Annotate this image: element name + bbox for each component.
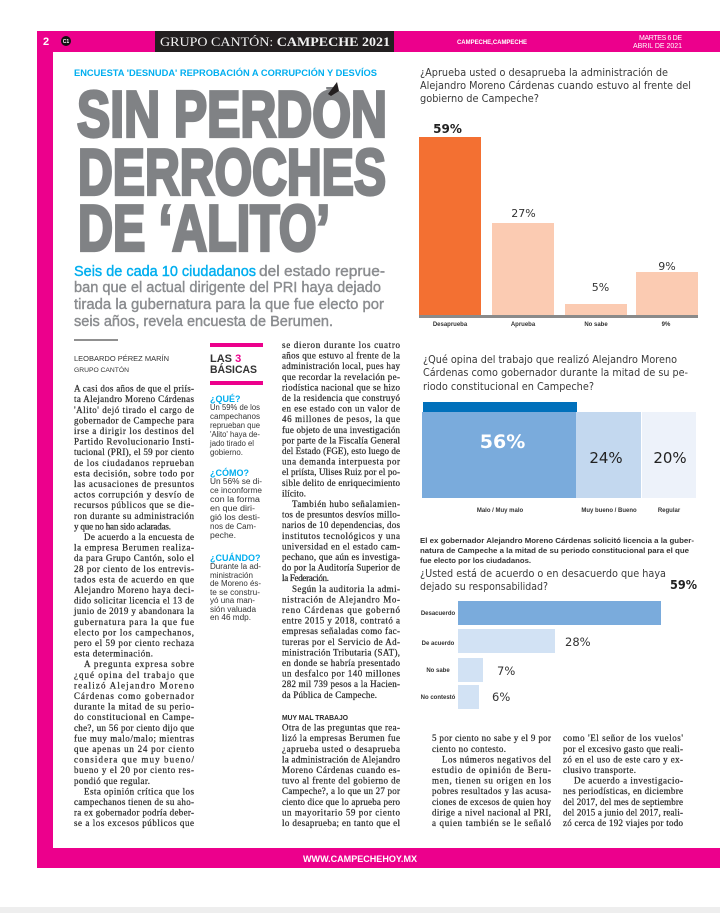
chart 3: agreement horizontal bars: No contestó xyxy=(421,695,456,701)
article column 1: pero el 59 por ciento rechaza xyxy=(74,638,194,648)
article column 2: reno Cárdenas que gobernó xyxy=(282,605,400,615)
article column 1: esta decisión, sobre todo por xyxy=(74,468,194,478)
chart 2: work opinion stacked bar: riodo constitucional en Campeche? xyxy=(423,381,594,393)
article column 2: 282 mil 739 pesos a la Hacien- xyxy=(282,679,400,689)
sidebar: las 3 básicas: gobierno. xyxy=(210,448,243,457)
page frame: header band, side strip and footer: WWW.CAMPECHEHOY.MX xyxy=(303,854,417,864)
sidebar: las 3 básicas xyxy=(209,343,263,622)
article column 2: administración local, pues hay xyxy=(282,361,400,371)
article column 1: 28 por ciento de los entrevis- xyxy=(74,564,194,574)
sidebar: las 3 básicas: ministración xyxy=(210,571,253,580)
article column 1: campechanos tienen de su aho- xyxy=(74,797,194,807)
chart 2: work opinion stacked bar: 20% xyxy=(653,449,687,467)
sidebar: las 3 básicas: campechanos xyxy=(210,412,260,421)
article column 1: recursos públicos que se die- xyxy=(74,500,194,510)
article column 3: Los números negativos del xyxy=(442,754,551,764)
article column 2: años que estuvo al frente de la xyxy=(282,351,400,361)
sidebar: las 3 básicas: gió los desti- xyxy=(210,513,260,522)
article column 1: gubernatura para la que fue xyxy=(74,617,194,627)
article column 3: 5 por ciento no sabe y el 9 por xyxy=(432,733,551,743)
article column 1: de los ciudadanos reprueban xyxy=(74,458,194,468)
article column 2: institutos tecnológicos y una xyxy=(282,531,400,541)
article column 3: men, tienen su origen en los xyxy=(432,776,551,786)
article column 2: universidad en el estado cam- xyxy=(282,541,400,551)
headline: DE ‘ALITO’ xyxy=(78,192,330,264)
chart 2: work opinion stacked bar: Muy bueno / Bueno xyxy=(581,508,637,514)
article column 3: a quien también se le señaló xyxy=(432,818,552,828)
article column 1: bueno y el 20 por ciento res- xyxy=(74,765,194,775)
chart 3: agreement horizontal bars xyxy=(420,568,697,709)
article column 1: do constitucional en Campe- xyxy=(74,712,194,722)
article column 1: actos corrupción y desvío de xyxy=(74,490,194,500)
chart 3: agreement horizontal bars: No sabe xyxy=(426,668,450,674)
article column 2: Otra de las preguntas que rea- xyxy=(282,723,400,733)
article column 3: ciones de excesos de quien hoy xyxy=(432,797,552,807)
article column 2: riodística nacional que se hizo xyxy=(282,382,400,392)
page frame: header band, side strip and footer: C1 xyxy=(63,39,69,45)
article column 1: ta Alejandro Moreno Cárdenas xyxy=(74,394,194,404)
article column 2: la administración de Alejandro xyxy=(282,754,400,764)
subheading xyxy=(74,263,385,330)
article column 1: junio de 2019 y abandonara la xyxy=(73,606,194,616)
article column 1: Esta opinión crítica que los xyxy=(84,786,194,796)
article column 2: sible delito de enriquecimiento xyxy=(282,478,400,488)
article column 2: fue objeto de una investigación xyxy=(282,425,400,435)
chart 3: agreement horizontal bars: 28% xyxy=(565,635,591,649)
article column 2: un mayoritario 59 por ciento xyxy=(282,807,400,817)
chart 3: agreement horizontal bars: 59% xyxy=(670,578,697,592)
kicker: ENCUESTA 'DESNUDA' REPROBACIÓN A CORRUPCIÓN Y DESVÍOS xyxy=(74,67,377,79)
article column 2: da Pública de Campeche. xyxy=(282,690,377,700)
article column 1: esta determinación. xyxy=(74,649,153,659)
article column 2: el priísta, Ulises Ruiz por el po- xyxy=(282,467,400,477)
chart 2: work opinion stacked bar xyxy=(422,354,696,514)
article column 2: que recordar la revelación pe- xyxy=(282,372,400,382)
article column 1: las acusaciones de presuntos xyxy=(74,479,194,489)
article column 4: del 2015 a junio del 2017, reali- xyxy=(563,807,683,817)
article column 2: del Estado (FGE), esto luego de xyxy=(282,446,400,456)
article column 4: como 'El señor de los vuelos' xyxy=(563,733,683,743)
article column 2: do por la Auditoría Superior de xyxy=(282,563,400,573)
chart 2: work opinion stacked bar: Malo / Muy malo xyxy=(477,508,524,514)
article column 2: de la residencia que construyó xyxy=(282,393,400,403)
sidebar: las 3 básicas: ¿CÓMO? xyxy=(210,467,249,478)
chart 1: approval bar chart: gobierno de Campeche? xyxy=(420,93,539,105)
article column 4 xyxy=(563,733,684,828)
chart 1: approval bar chart: ¿Aprueba usted o desaprueba la administración de xyxy=(420,67,668,79)
article column 2: lizó la empresas Berumen fue xyxy=(282,733,400,743)
chart 1: approval bar chart: Aprueba xyxy=(511,322,536,328)
page frame: header band, side strip and footer: 2 xyxy=(43,36,49,48)
subheading: tirada la gubernatura para la que fue electo por xyxy=(74,296,384,313)
sidebar: las 3 básicas: nos de Cam- xyxy=(210,522,256,531)
article column 1: pondió que regular. xyxy=(74,776,150,786)
article column 1: fue muy malo/malo; mientras xyxy=(74,733,194,743)
chart 3: agreement horizontal bars: De acuerdo xyxy=(422,641,455,647)
article column 2: ilícito. xyxy=(282,488,306,498)
article column 1: que apenas un 24 por ciento xyxy=(74,744,194,754)
article column 2: en donde se habría presentado xyxy=(282,658,400,668)
chart 3: agreement horizontal bars: ¿Usted está de acuerdo o en desacuerdo que haya xyxy=(420,568,666,580)
article column 1: A casi dos años de que el priís- xyxy=(74,384,194,394)
article column 1: y que no han sido aclaradas. xyxy=(74,521,171,531)
chart 1: approval bar chart: Desaprueba xyxy=(433,322,468,328)
article column 2: narios de 10 dependencias, dos xyxy=(282,520,400,530)
headline: DERROCHES xyxy=(78,136,386,208)
article column 2: entre 2015 y 2018, contrató a xyxy=(282,616,400,626)
article column 3: estudio de opinión de Beru- xyxy=(432,765,551,775)
article column 3 xyxy=(432,733,552,828)
note on license request: El ex gobernador Alejandro Moreno Cárdenas solicitó licencia a la guber- xyxy=(420,536,695,545)
sidebar: las 3 básicas: ¿CUÁNDO? xyxy=(210,553,260,563)
sidebar: las 3 básicas: ¿QUÉ? xyxy=(210,394,240,404)
article column 4: De acuerdo a investigacio- xyxy=(574,776,683,786)
sidebar: las 3 básicas: BÁSICAS xyxy=(210,363,257,376)
sidebar: las 3 básicas: jado tirado el xyxy=(209,439,254,448)
sidebar: las 3 básicas: ce inconforme xyxy=(210,486,263,495)
article column 4: zó en el uso de este caro y ex- xyxy=(563,754,683,764)
page frame: header band, side strip and footer: MARTES 6 DE xyxy=(639,35,682,42)
chart 1: approval bar chart: No sabe xyxy=(584,322,608,328)
sidebar: las 3 básicas: Un 56% se di- xyxy=(210,477,262,486)
article column 2: Campeche?, a lo que un 27 por xyxy=(282,786,400,796)
article column 2: un desfalco por 140 millones xyxy=(282,669,400,679)
article column 2: ciento dice que lo aprueba pero xyxy=(282,797,400,807)
sidebar: las 3 básicas: de Moreno és- xyxy=(210,579,261,588)
article column 3: dirige a nivel nacional al PRI, xyxy=(432,807,551,817)
article column 1: A pregunta expresa sobre xyxy=(84,659,194,669)
note on license request xyxy=(420,536,695,565)
subheading: seis años, revela encuesta de Berumen. xyxy=(74,313,333,330)
sidebar: las 3 básicas: Durante la ad- xyxy=(210,562,261,571)
article column 2: lo desaprueba; en tanto que el xyxy=(282,818,400,828)
article column 3: ciento no contesto. xyxy=(432,744,506,754)
article column 2: se dieron durante los cuatro xyxy=(282,340,400,350)
article column 4: clusivo transporte. xyxy=(563,765,636,775)
note on license request: natura de Campeche a la mitad de su periodo constitucional para el que xyxy=(420,546,689,555)
article column 2: tos de presuntos desvíos millo- xyxy=(282,510,400,520)
article column 1: la empresa Berumen realiza- xyxy=(74,543,194,553)
article column 2: tuvo al frente del gobierno de xyxy=(282,776,400,786)
chart 1: approval bar chart: 9% xyxy=(658,260,676,273)
article column 1: irse a dirigir los destinos del xyxy=(74,426,194,436)
article column 3: pobres resultados y las acusa- xyxy=(432,786,551,796)
article column 2: una demanda interpuesta por xyxy=(282,457,400,467)
article column 1: tucional (PRI), el 59 por ciento xyxy=(74,447,194,457)
article column 2: nistración de Alejandro Mo- xyxy=(282,594,400,604)
chart 1: approval bar chart: 9% xyxy=(662,322,671,328)
note on license request: fue electo por los ciudadanos. xyxy=(420,556,531,565)
article column 1: ra ex gobernador podría deber- xyxy=(74,808,194,818)
article column 2: ministración Tributaria (SAT), xyxy=(282,647,400,657)
chart 1: approval bar chart: 5% xyxy=(592,281,609,294)
article column 1: realizó Alejandro Moreno xyxy=(74,680,195,690)
sidebar: las 3 básicas: te se constru- xyxy=(210,588,260,597)
sidebar: las 3 básicas: en 46 mdp. xyxy=(210,613,251,622)
article column 4: por el excesivo gasto que reali- xyxy=(563,744,683,754)
article column 1: considera que muy bueno/ xyxy=(74,755,194,765)
subheading: Seis de cada 10 ciudadanos xyxy=(74,263,256,280)
chart 3: agreement horizontal bars: 7% xyxy=(497,664,515,678)
article column 2: empresas señaladas como fac- xyxy=(282,626,400,636)
article column 1: tados esta de acuerdo en que xyxy=(74,574,194,584)
subheading: del estado reprue- xyxy=(259,263,385,280)
article column 4: zó cerca de 192 viajes por todo xyxy=(563,818,684,828)
chart 1: approval bar chart: Alejandro Moreno Cárdenas cuando estuvo al frente del xyxy=(420,80,691,92)
sidebar: las 3 básicas: yó una man- xyxy=(210,596,255,605)
chart 2: work opinion stacked bar: Cárdenas como gobernador durante la mitad de su pe- xyxy=(423,367,688,379)
chart 1: approval bar chart xyxy=(419,67,698,328)
chart 3: agreement horizontal bars: dejado su responsabilidad? xyxy=(420,581,548,593)
chart 1: approval bar chart: 59% xyxy=(433,122,462,136)
sidebar: las 3 básicas: sión valuada xyxy=(210,605,257,614)
page frame: header band, side strip and footer: GRUPO CANTÓN: CAMPECHE 2021 xyxy=(160,34,390,49)
page frame: header band, side strip and footer: CAMPECHE,CAMPECHE xyxy=(457,40,527,46)
article column 2: Según la auditoria la admi- xyxy=(292,584,400,594)
byline: LEOBARDO PÉREZ MARÍN xyxy=(74,354,169,363)
page frame: header band, side strip and footer: ABRIL DE 2021 xyxy=(633,43,682,50)
article column 2: la Federación. xyxy=(282,573,329,583)
sidebar: las 3 básicas: Un 59% de los xyxy=(210,403,260,412)
article column 1 xyxy=(73,384,194,828)
article column 1: da para Grupo Cantón, solo el xyxy=(74,553,194,563)
article column 1: che?, un 56 por ciento dijo que xyxy=(74,723,194,733)
sidebar: las 3 básicas: reprueban que xyxy=(210,421,261,430)
article column 1: ¿qué opina del trabajo que xyxy=(74,670,194,680)
article column 2: en ese estado con un valor de xyxy=(282,404,400,414)
byline xyxy=(74,354,169,374)
chart 2: work opinion stacked bar: ¿Qué opina del trabajo que realizó Alejandro Moreno xyxy=(423,354,677,366)
article column 2: MUY MAL TRABAJO xyxy=(282,715,349,722)
article column 2: por parte de la Fiscalía General xyxy=(282,435,400,445)
sidebar: las 3 básicas: peche. xyxy=(210,531,236,540)
article column 2: pechano, que aún es investiga- xyxy=(282,552,400,562)
article column 2: ¿aprueba usted o desaprueba xyxy=(282,744,400,754)
sidebar: las 3 básicas: con la forma xyxy=(210,495,261,504)
chart 2: work opinion stacked bar: Regular xyxy=(658,508,681,514)
article column 1: 'Alito' dejó tirado el cargo de xyxy=(74,405,194,415)
article column 4: nes periodísticas, en diciembre xyxy=(563,786,683,796)
sidebar: las 3 básicas: en que diri- xyxy=(210,504,255,513)
article column 1: durante la mitad de su perio- xyxy=(74,702,194,712)
article column 4: del 2017, del mes de septiembre xyxy=(563,797,683,807)
headline xyxy=(77,66,387,264)
chart 2: work opinion stacked bar: 24% xyxy=(589,449,623,467)
article column 1: dido solicitar licencia el 13 de xyxy=(74,596,194,606)
chart 2: work opinion stacked bar: 56% xyxy=(480,431,525,453)
article column 1: Cárdenas como gobernador xyxy=(74,691,194,701)
article column 1: De acuerdo a la encuesta de xyxy=(84,532,194,542)
article column 2: Moreno Cárdenas cuando es- xyxy=(282,765,400,775)
sidebar: las 3 básicas: 'Alito' haya de- xyxy=(210,430,260,439)
article column 2 xyxy=(282,340,400,828)
headline: SIN PERDÓN xyxy=(77,78,387,150)
article column 1: electo por los campechanos, xyxy=(74,627,194,637)
subheading: ban que el actual dirigente del PRI haya dejado xyxy=(74,279,381,296)
byline: GRUPO CANTÓN xyxy=(74,365,129,374)
article column 1: ron durante su administración xyxy=(74,511,194,521)
article column 1: gobernador de Campeche para xyxy=(74,415,194,425)
chart 1: approval bar chart: 27% xyxy=(511,207,536,220)
chart 3: agreement horizontal bars: Desacuerdo xyxy=(421,611,456,617)
article column 1: Partido Revolucionario Insti- xyxy=(74,437,194,447)
article column 2: También hubo señalamien- xyxy=(292,499,400,509)
chart 3: agreement horizontal bars: 6% xyxy=(492,690,510,704)
article column 1: Alejandro Moreno haya deci- xyxy=(74,585,194,595)
sidebar: las 3 básicas: LAS 3 xyxy=(210,353,241,365)
article column 1: se a los excesos públicos que xyxy=(74,818,194,828)
article column 2: tureras por el Servicio de Ad- xyxy=(282,637,400,647)
article column 2: 46 millones de pesos, la que xyxy=(282,414,400,424)
